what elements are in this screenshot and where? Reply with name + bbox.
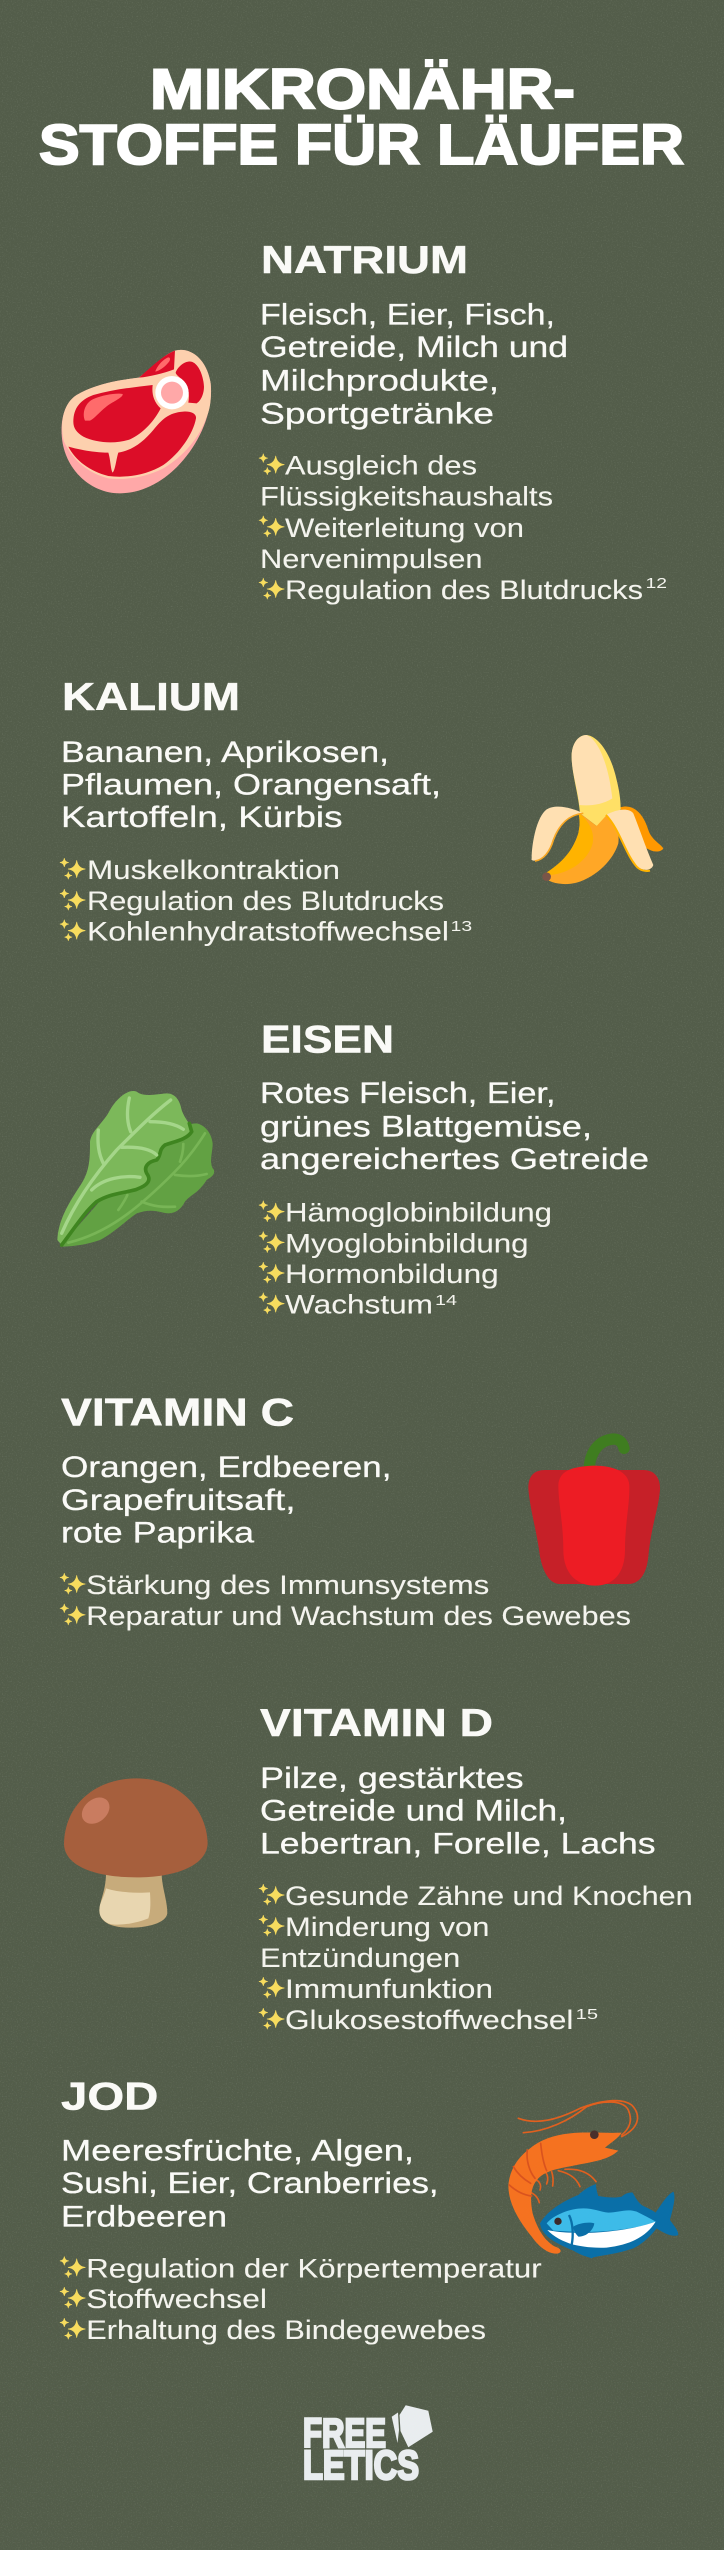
benefits: vitamin d: Immunfunktion <box>285 1974 493 2004</box>
icon: steak <box>62 350 211 493</box>
benefits: vitamin d: Gesunde Zähne und Knochen <box>285 1881 693 1911</box>
food list: vitamin c: Grapefruitsaft, <box>61 1484 296 1517</box>
food list: eisen <box>260 1077 649 1176</box>
benefits: natrium: 12 <box>646 575 667 592</box>
benefits: kalium: Kohlenhydratstoffwechsel <box>87 917 449 947</box>
benefits: vitamin c: Stärkung des Immunsystems <box>86 1570 489 1600</box>
benefits: vitamin d <box>259 1881 693 2035</box>
logo: freeletics: FREE <box>303 2410 386 2456</box>
benefits: kalium: Regulation des Blutdrucks <box>87 886 444 916</box>
benefits: natrium <box>259 451 667 605</box>
benefits: vitamin d: 15 <box>576 2006 598 2023</box>
food list: vitamin c <box>61 1451 392 1550</box>
benefits: vitamin c <box>60 1570 631 1631</box>
benefits: kalium: Muskelkontraktion <box>87 855 340 885</box>
benefits: vitamin c: Reparatur und Wachstum des Gewebes <box>86 1601 631 1631</box>
panel: eisen <box>57 1018 649 1320</box>
food list: vitamin c: rote Paprika <box>61 1517 254 1550</box>
title: STOFFE FÜR LÄUFER <box>39 113 684 177</box>
icon: fish <box>540 2184 678 2258</box>
panel: jod <box>60 2075 678 2345</box>
benefits: vitamin d: Glukosestoffwechsel <box>285 2005 573 2035</box>
benefits: jod: Regulation der Körpertemperatur <box>86 2253 542 2283</box>
heading: eisen: EISEN <box>261 1018 394 1062</box>
food list: kalium <box>61 736 441 834</box>
benefits: natrium: Weiterleitung von <box>285 513 524 543</box>
icon: lettuce leaf <box>57 1091 214 1247</box>
benefits: natrium: Nervenimpulsen <box>260 544 482 574</box>
food list: natrium: Getreide, Milch und <box>260 331 568 364</box>
title: MIKRONÄHR- <box>150 58 575 122</box>
food list: eisen: grünes Blattgemüse, <box>260 1111 592 1144</box>
benefits: eisen: Wachstum <box>285 1290 433 1320</box>
benefits: jod: Stoffwechsel <box>86 2284 267 2314</box>
food list: jod <box>61 2135 439 2234</box>
heading: kalium: KALIUM <box>62 676 240 719</box>
food list: kalium: Bananen, Aprikosen, <box>61 736 389 769</box>
heading: jod: JOD <box>61 2075 158 2118</box>
heading: vitamin c: VITAMIN C <box>61 1392 294 1434</box>
benefits: natrium: Flüssigkeitshaushalts <box>260 482 553 512</box>
food list: vitamin d: Lebertran, Forelle, Lachs <box>260 1828 656 1860</box>
panel: kalium <box>60 676 663 947</box>
heading: vitamin d: VITAMIN D <box>260 1702 493 1745</box>
food list: kalium: Kartoffeln, Kürbis <box>61 801 342 834</box>
logo: freeletics: LETICS <box>303 2442 419 2488</box>
benefits: kalium <box>60 855 472 947</box>
food list: jod: Erdbeeren <box>61 2200 227 2234</box>
panel: vitamin d <box>64 1702 693 2035</box>
panel: vitamin c <box>60 1392 660 1631</box>
food list: jod: Meeresfrüchte, Algen, <box>61 2135 414 2168</box>
icon: banana <box>531 735 663 884</box>
icon: red bell pepper <box>528 1439 660 1586</box>
benefits: eisen: 14 <box>435 1292 457 1309</box>
benefits: natrium: Regulation des Blutdrucks <box>285 575 643 605</box>
benefits: jod: Erhaltung des Bindegewebes <box>86 2315 486 2345</box>
benefits: eisen: Hämoglobinbildung <box>285 1198 552 1228</box>
icon: shrimp <box>508 2101 638 2254</box>
icon: shrimp and fish <box>508 2101 678 2258</box>
food list: vitamin d <box>260 1762 656 1860</box>
food list: kalium: Pflaumen, Orangensaft, <box>61 768 441 801</box>
food list: vitamin d: Getreide und Milch, <box>260 1794 567 1827</box>
food list: natrium: Milchprodukte, <box>260 364 499 398</box>
title <box>39 58 684 177</box>
benefits: eisen: Hormonbildung <box>285 1259 499 1289</box>
benefits: vitamin d: Minderung von <box>285 1912 489 1942</box>
benefits: jod <box>60 2253 542 2345</box>
food list: vitamin c: Orangen, Erdbeeren, <box>61 1451 392 1484</box>
food list: eisen: angereichertes Getreide <box>260 1143 649 1176</box>
benefits: natrium: Ausgleich des <box>285 451 477 481</box>
panel: natrium <box>62 239 667 605</box>
food list: vitamin d: Pilze, gestärktes <box>260 1762 524 1795</box>
logo: freeletics <box>303 2405 433 2488</box>
food list: natrium: Fleisch, Eier, Fisch, <box>260 298 555 332</box>
heading: natrium: NATRIUM <box>261 239 468 282</box>
icon: mushroom <box>64 1778 208 1928</box>
food list: jod: Sushi, Eier, Cranberries, <box>61 2167 439 2200</box>
benefits: eisen: Myoglobinbildung <box>285 1228 529 1258</box>
food list: natrium <box>260 298 568 431</box>
food list: eisen: Rotes Fleisch, Eier, <box>260 1077 556 1110</box>
benefits: kalium: 13 <box>451 918 472 935</box>
food list: natrium: Sportgetränke <box>260 398 494 431</box>
benefits: eisen <box>259 1198 552 1320</box>
benefits: vitamin d: Entzündungen <box>260 1943 460 1973</box>
